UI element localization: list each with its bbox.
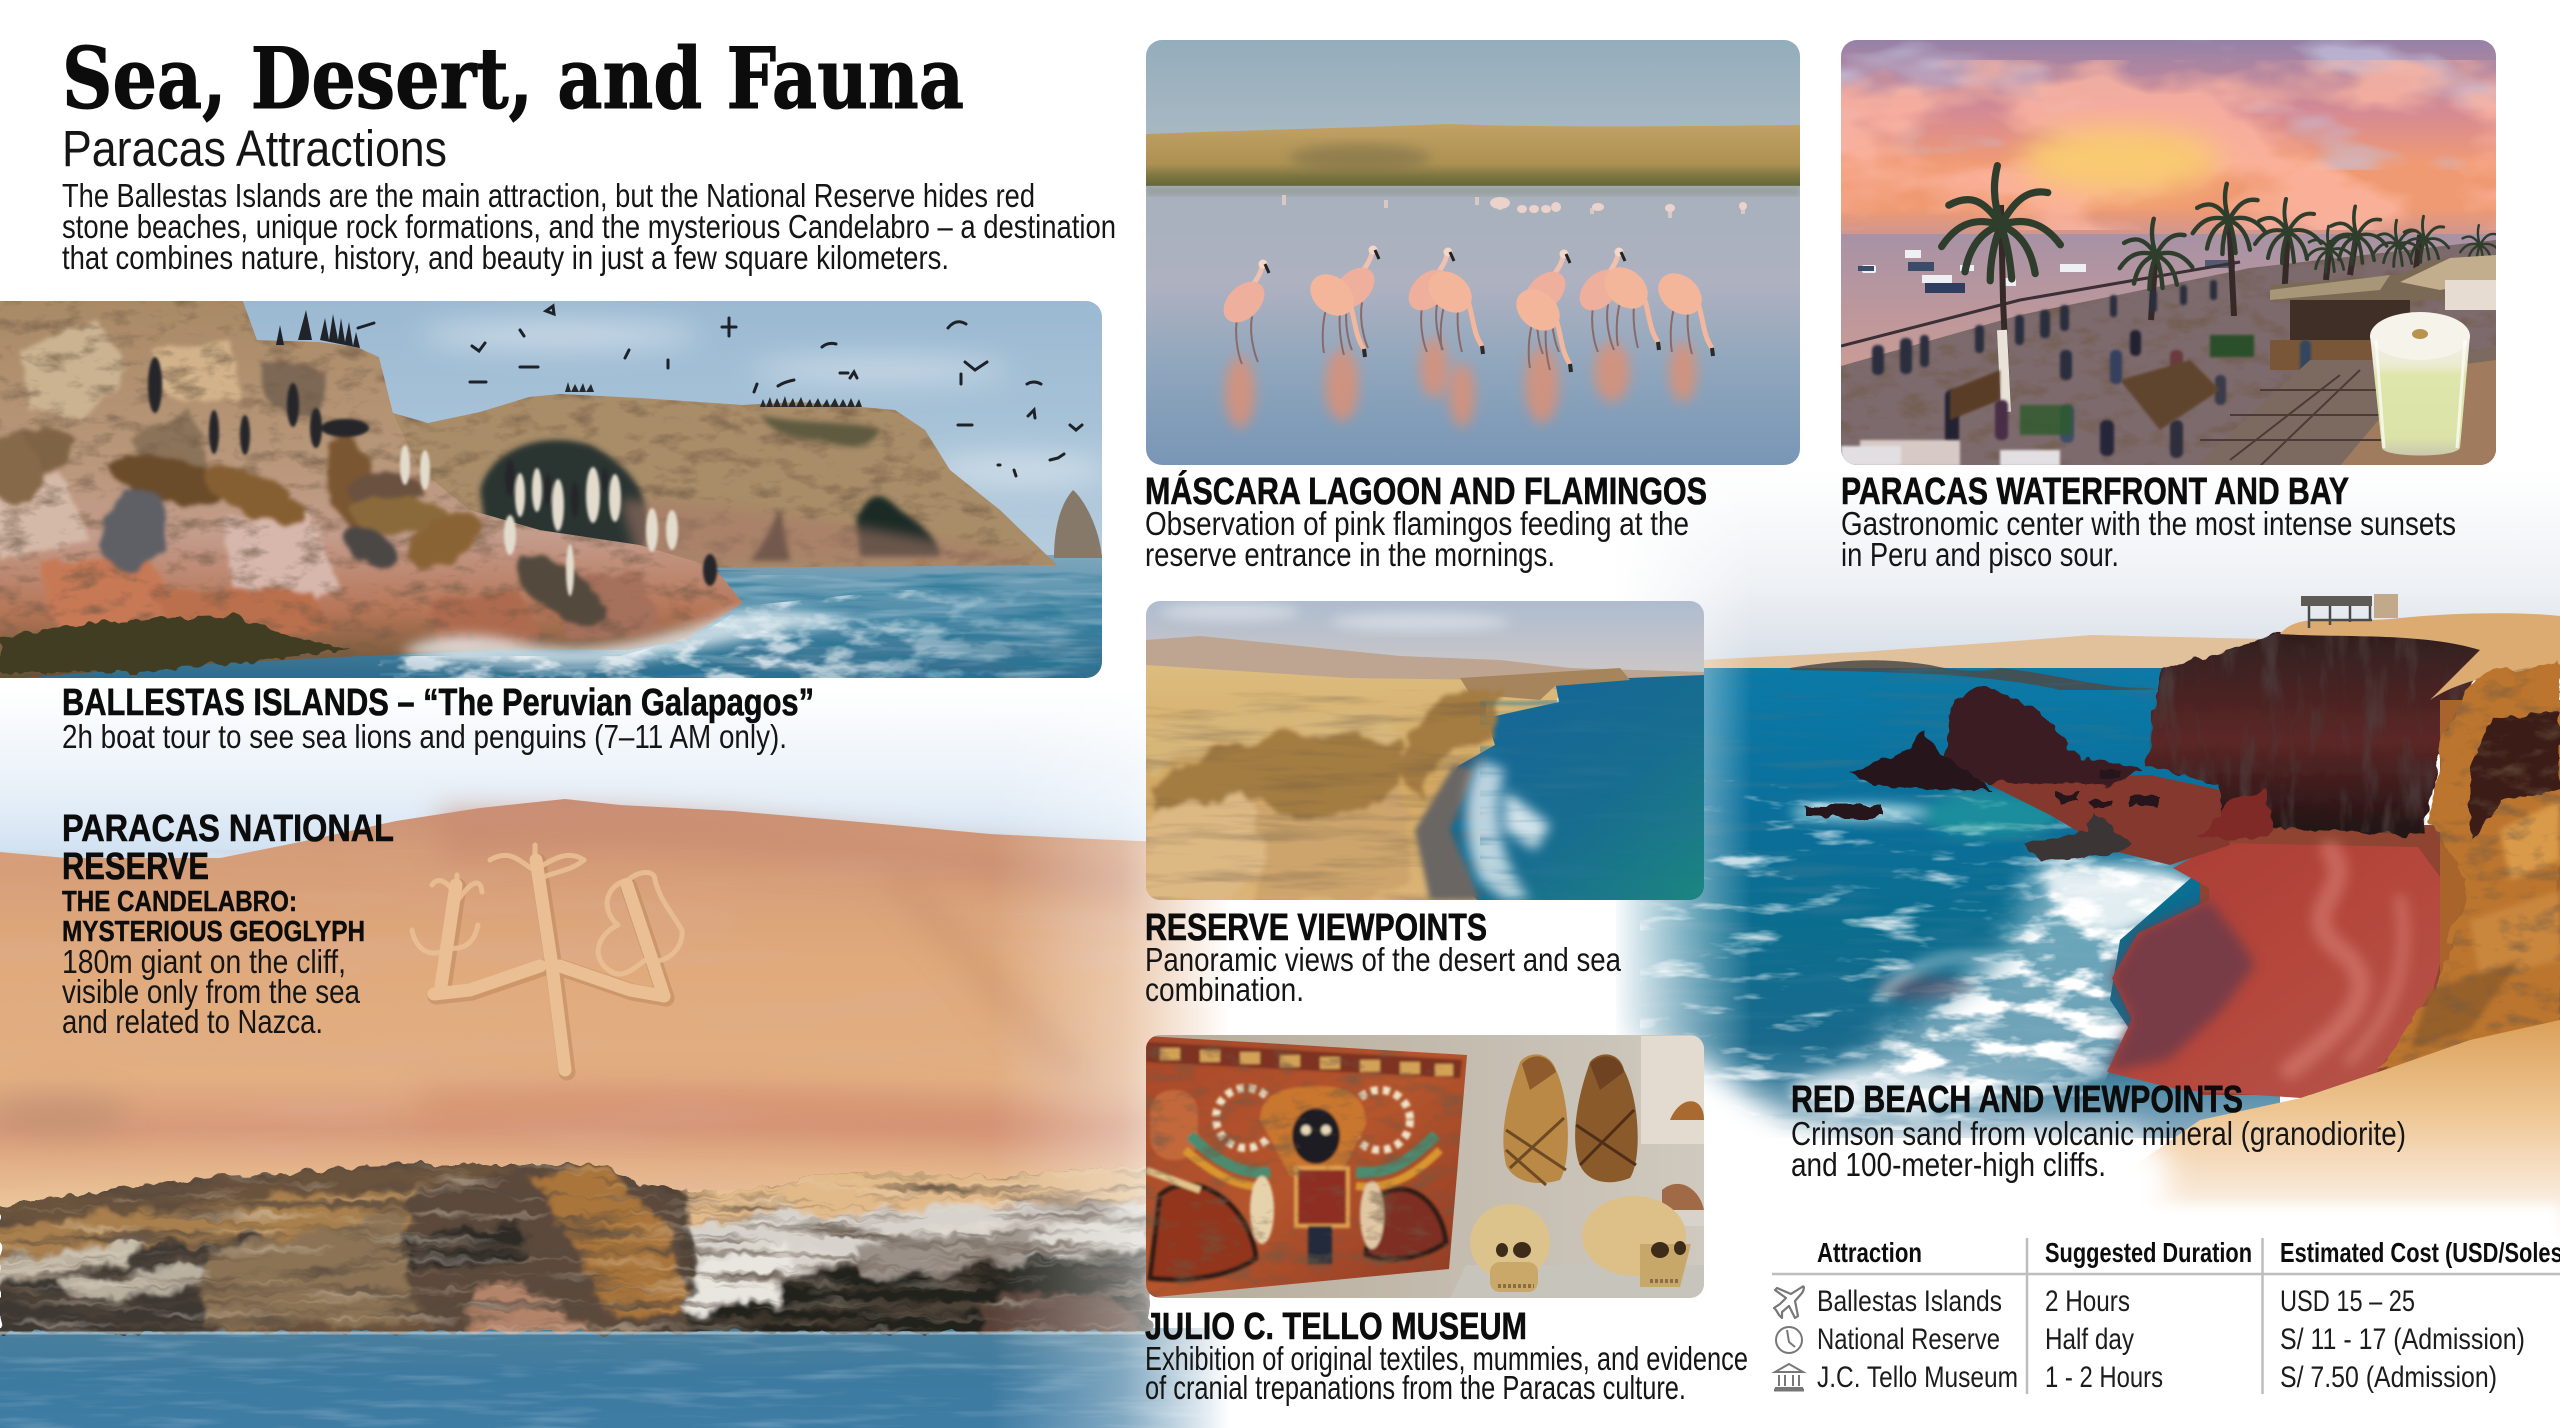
caption: waterfront: PARACAS WATERFRONT AND BAY xyxy=(1841,471,2349,513)
caption: tello museum: of cranial trepanations from the Paracas culture. xyxy=(1145,1369,1686,1406)
cliff highlight xyxy=(2200,790,2275,840)
left sky xyxy=(0,690,1250,930)
surf crest xyxy=(400,610,860,666)
caption: red beach xyxy=(1791,1079,2406,1183)
purple cloud streaks xyxy=(1841,40,2496,170)
pisco sour glass xyxy=(2370,312,2470,456)
palm trunks xyxy=(2001,205,2420,412)
caption: paracas national reserve: PARACAS NATIONAL xyxy=(62,808,394,850)
far rock stack xyxy=(1054,490,1102,558)
table header: Suggested Duration xyxy=(2045,1237,2252,1268)
mummy bundles xyxy=(1503,1054,1568,1185)
caption: reserve viewpoints: Panoramic views of the desert and sea xyxy=(1145,941,1622,978)
clouds xyxy=(420,321,1110,486)
summary table xyxy=(1772,1237,2560,1394)
caption: paracas national reserve xyxy=(62,808,394,1040)
moss at base xyxy=(0,615,350,672)
caption: ballestas islands: 2h boat tour to see sea lions and penguins (7–11 AM only). xyxy=(62,718,787,755)
crowd of people xyxy=(1872,280,2311,458)
far headland rocks xyxy=(1790,660,2158,690)
tapestry xyxy=(1146,1036,1467,1298)
intro text: stone beaches, unique rock formations, and the mysterious Candelabro – a destination xyxy=(62,208,1116,245)
photo: waterfront xyxy=(1841,40,2500,466)
intro text: The Ballestas Islands are the main attraction, but the National Reserve hides red xyxy=(62,177,1035,214)
right sky xyxy=(1560,470,2560,680)
sky xyxy=(1146,601,1704,681)
caption: red beach: RED BEACH AND VIEWPOINTS xyxy=(1791,1079,2243,1121)
surf xyxy=(1466,760,1550,900)
subtitle: Paracas Attractions xyxy=(62,120,447,177)
surf line xyxy=(0,1332,1150,1334)
desert hill xyxy=(0,799,1250,1210)
red ground behind rocks xyxy=(1980,775,2230,865)
sea stack xyxy=(1944,686,2143,784)
panel: paracas national reserve backdrop xyxy=(0,690,1288,1428)
skulls xyxy=(1470,1204,1550,1292)
orange cloud streaks xyxy=(1841,60,2496,230)
railing xyxy=(1841,262,2240,346)
deck planks xyxy=(2200,370,2440,466)
right orange rock wall xyxy=(2380,660,2560,1075)
photo: tello museum xyxy=(1146,1035,1704,1298)
rock facets xyxy=(0,320,660,650)
restaurant roofs xyxy=(2270,255,2496,370)
sea xyxy=(0,1328,1250,1428)
dune dark patch xyxy=(1290,144,1430,172)
hill shading xyxy=(0,810,1150,1150)
lagoon water xyxy=(1146,186,1800,466)
tapestry pattern xyxy=(1146,1042,1462,1279)
left fade of sea xyxy=(1612,470,1752,1260)
row: national reserve: Half day xyxy=(2045,1323,2134,1356)
table rules xyxy=(1772,1238,2560,1394)
table header xyxy=(1817,1237,2560,1268)
row: ballestas xyxy=(1817,1285,2415,1318)
viewing platform xyxy=(2301,594,2398,628)
caption: paracas national reserve: MYSTERIOUS GEOGLYPH xyxy=(62,916,365,948)
wet sand xyxy=(2107,900,2255,1072)
intro text xyxy=(62,177,1116,276)
caption: waterfront xyxy=(1841,471,2456,573)
cliff streaks xyxy=(2149,632,2468,834)
intro text: that combines nature, history, and beauty in just a few square kilometers. xyxy=(62,239,949,276)
red sand beach xyxy=(2107,843,2454,1098)
caption: ballestas islands: BALLESTAS ISLANDS – “The Peruvian Galapagos” xyxy=(62,682,814,724)
artifact on wall xyxy=(1670,1101,1704,1120)
caption: mascara lagoon: Observation of pink flamingos feeding at the xyxy=(1145,505,1689,542)
promenade texture xyxy=(1841,240,2496,466)
photo: ballestas islands xyxy=(0,301,1110,681)
caption: paracas national reserve: 180m giant on the cliff, xyxy=(62,943,346,980)
bay water xyxy=(1841,234,2496,374)
birds on rock top xyxy=(276,310,360,348)
row: tello museum: 1 - 2 Hours xyxy=(2045,1361,2163,1394)
sea ripples xyxy=(0,1330,1250,1428)
row: tello museum: S/ 7.50 (Admission) xyxy=(2280,1361,2497,1394)
icon: museum xyxy=(1774,1364,1804,1390)
penguins xyxy=(148,357,717,596)
dark cliff xyxy=(2148,625,2560,835)
caption: tello museum xyxy=(1145,1306,1748,1406)
right wall underlay xyxy=(2370,700,2560,1090)
flamingos xyxy=(1216,246,1713,372)
dune xyxy=(1146,124,1800,190)
row: ballestas: 2 Hours xyxy=(2045,1285,2130,1318)
island dark caves xyxy=(480,415,940,560)
far cliffs xyxy=(1460,668,1630,700)
shadowed rock recess xyxy=(2470,710,2560,840)
back island xyxy=(393,394,1057,570)
caption: mascara lagoon: MÁSCARA LAGOON AND FLAMINGOS xyxy=(1145,469,1707,513)
placard xyxy=(1641,1036,1704,1144)
row: tello museum: J.C. Tello Museum xyxy=(1817,1361,2018,1394)
caption: tello museum: JULIO C. TELLO MUSEUM xyxy=(1145,1306,1527,1348)
reflections of dune xyxy=(1146,186,1800,196)
distant mountains xyxy=(1700,635,2265,690)
caption: tello museum: Exhibition of original textiles, mummies, and evidence xyxy=(1145,1340,1748,1377)
photo: reserve viewpoints xyxy=(1146,601,1704,900)
distant flamingos xyxy=(1284,195,1747,218)
rock crack texture xyxy=(0,301,760,681)
photo: mascara lagoon xyxy=(1146,40,1800,466)
row: national reserve xyxy=(1817,1323,2525,1356)
main foreground rock xyxy=(0,301,743,680)
right sea xyxy=(1560,668,2280,1138)
wall xyxy=(1146,1035,1704,1298)
sun glow xyxy=(2020,128,2220,192)
row: tello museum xyxy=(1817,1361,2497,1394)
row: national reserve: National Reserve xyxy=(1817,1323,2000,1356)
foam fade to white xyxy=(1560,1020,2170,1270)
sea xyxy=(0,555,1102,680)
cafe tables and planters xyxy=(1841,335,2254,466)
surf foam xyxy=(340,590,1110,680)
shore foam xyxy=(1798,847,2191,1128)
wave texture xyxy=(1640,668,2191,1130)
sea lions xyxy=(0,421,615,638)
caption: reserve viewpoints xyxy=(1145,907,1622,1008)
caption: reserve viewpoints: combination. xyxy=(1145,971,1304,1008)
right fade of desert xyxy=(990,690,1230,1428)
caption: waterfront: in Peru and pisco sour. xyxy=(1841,536,2119,573)
flamingo reflections xyxy=(1225,338,1697,428)
boats xyxy=(1858,250,2235,293)
pink streaks on sand xyxy=(2290,850,2403,1070)
sunset sky xyxy=(1841,40,2496,245)
birds in flight xyxy=(358,306,1082,476)
beach underlay xyxy=(2200,825,2500,1095)
caption: paracas national reserve: and related to Nazca. xyxy=(62,1003,323,1040)
deck warm light xyxy=(2340,360,2496,466)
sea texture xyxy=(1480,700,1704,900)
panel: red beach backdrop xyxy=(1540,470,2560,1428)
icon: clock xyxy=(1776,1327,1802,1353)
cliff faces xyxy=(1146,691,1500,900)
icon: candelabro geoglyph xyxy=(412,845,682,1072)
sea waves xyxy=(640,570,1102,678)
rock highlights xyxy=(2410,800,2560,1050)
caption: paracas national reserve: THE CANDELABRO: xyxy=(62,886,297,918)
clouds xyxy=(1160,603,1510,631)
bird colony ridge xyxy=(565,382,862,407)
rocky cliff xyxy=(0,1150,1150,1340)
sea xyxy=(1431,675,1704,900)
wall texture xyxy=(2388,667,2560,1062)
sky xyxy=(243,301,1102,555)
caption: red beach: Crimson sand from volcanic mineral (granodiorite) xyxy=(1791,1115,2406,1152)
small rocks xyxy=(1806,731,2160,863)
dune streaks xyxy=(0,850,1250,1190)
caption: reserve viewpoints: RESERVE VIEWPOINTS xyxy=(1145,907,1487,949)
row: ballestas: Ballestas Islands xyxy=(1817,1285,2002,1318)
tapestry weave texture xyxy=(1146,1036,1468,1298)
row: ballestas: USD 15 – 25 xyxy=(2280,1285,2415,1318)
island texture xyxy=(393,390,1063,570)
cliff rim sand xyxy=(2280,613,2560,700)
promenade xyxy=(1841,240,2496,466)
caption: waterfront: Gastronomic center with the most intense sunsets xyxy=(1841,505,2456,542)
icon: plane xyxy=(1774,1287,1804,1318)
lower shelf xyxy=(1450,1265,1704,1298)
bottom fade to white xyxy=(1700,1205,2560,1428)
caption: mascara lagoon xyxy=(1145,469,1707,573)
distant mountains xyxy=(1146,636,1704,690)
caption: paracas national reserve: visible only from the sea xyxy=(62,973,361,1010)
caption: paracas national reserve: RESERVE xyxy=(62,846,209,888)
caption: red beach: and 100-meter-high cliffs. xyxy=(1791,1146,2106,1183)
palm trunk base xyxy=(2002,330,2006,412)
sand strata xyxy=(1146,690,1486,900)
caption: mascara lagoon: reserve entrance in the mornings. xyxy=(1145,536,1555,573)
desert plateau xyxy=(1146,665,1560,900)
caption: ballestas islands xyxy=(62,682,814,755)
dark beach strip xyxy=(1415,765,1480,900)
sand dune foreground xyxy=(2020,1020,2560,1245)
sky xyxy=(1146,40,1800,140)
island lower red band and pale streaks xyxy=(620,500,1050,566)
palm crowns xyxy=(1942,166,2500,289)
table header: Attraction xyxy=(1817,1237,1922,1268)
wooden deck xyxy=(2195,345,2496,466)
title: Sea, Desert, and Fauna xyxy=(62,29,964,128)
